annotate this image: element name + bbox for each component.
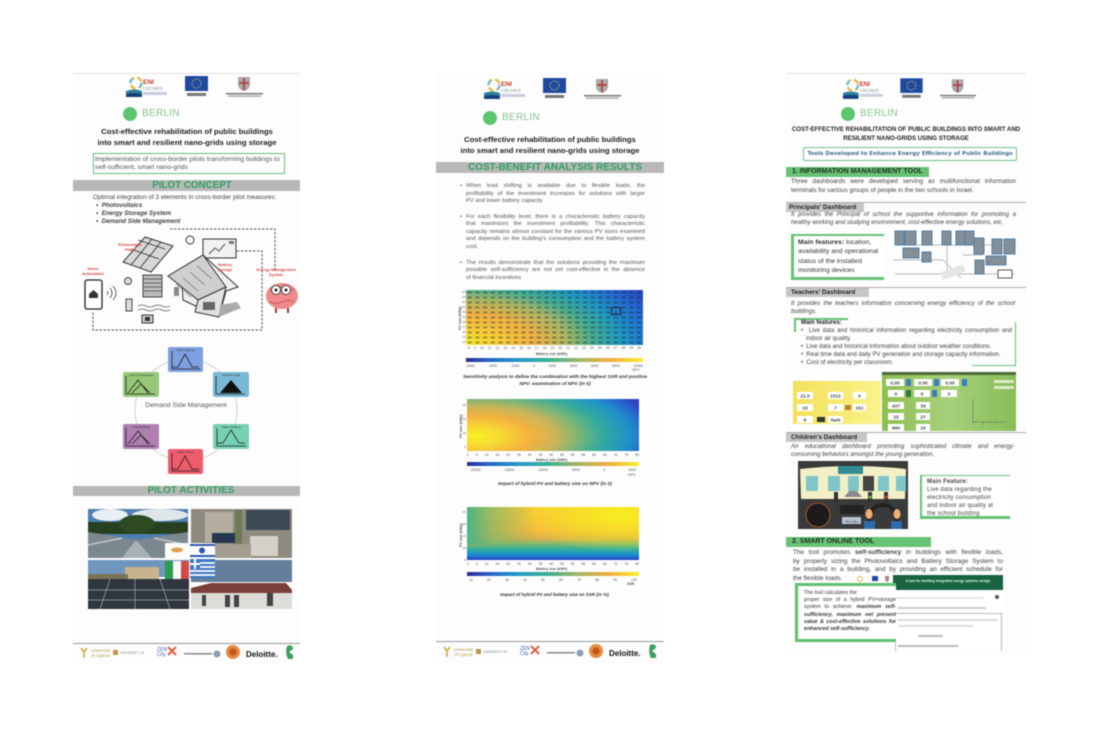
text block: principals — [790, 210, 1016, 226]
logos: programme and funders: ENI — [143, 79, 154, 86]
labels: diagram: Energy Management — [256, 267, 296, 272]
image: car dashboard game: Next Day — [845, 520, 858, 524]
logos: partners footer: UNIVERSITY OF — [483, 650, 507, 654]
callout: teachers main features: • Live data and historical information about outdoor weather conditions. — [801, 344, 991, 350]
callout: tools developed: Tools Developed to Enhance Energy Efficiency of Public Buildings — [807, 151, 1013, 157]
image: green dashboard — [881, 371, 1017, 432]
flag: Israel — [190, 543, 215, 558]
heading: childrens dashboard: Children's Dashboard — [791, 434, 857, 441]
text block: principals: healthy working and studying environment, cost-effective energy solutions, etc. — [791, 219, 1003, 226]
image: green dashboard: 0.00 — [918, 380, 928, 386]
logos: programme and funders — [125, 75, 264, 98]
logos: programme and funders — [483, 77, 622, 100]
heading: information management tool — [786, 167, 929, 177]
logo: BERLIN: BERLIN — [502, 112, 540, 123]
callout: tool calculation: system to achieve: maximum self- — [804, 604, 896, 610]
logos: partners footer: ZEN — [520, 646, 530, 652]
text block: children: An educational dashboard promoting sophisticated climate and energy- — [791, 443, 1015, 450]
image: yellow dashboard: 1012 — [830, 394, 841, 400]
icon: house — [168, 255, 241, 317]
text block: three dashboards: terminals for various groups of people in the two schools in Israel. — [791, 187, 974, 194]
panel: tools poster — [786, 72, 1026, 654]
box: valley filling: Valley Filling — [177, 450, 194, 454]
heading: childrens dashboard — [786, 433, 867, 442]
labels: diagram: Battery — [218, 262, 233, 267]
text block: findings: of financial incentives — [466, 275, 521, 281]
logo: BERLIN — [122, 106, 180, 122]
text block: findings: PV and lower battery capacity — [466, 198, 543, 204]
image: green dashboard: 0.00 — [945, 380, 955, 386]
heading: cost-benefit analysis results: COST-BENEFIT ANALYSIS RESULTS — [468, 162, 642, 173]
chart: sensitivity heatmap NPV: -6000 -4000 -2000 0 2000 4000 6000 8000 10000 — [466, 364, 643, 368]
labels: diagram: Home — [87, 266, 99, 271]
text block: findings: The results demonstrate that the solutions providing the maximum — [466, 260, 645, 266]
text block: findings: and depends on the building's consumption and the battery system — [466, 236, 645, 242]
text block: smart tool: The tool promotes self-sufficiency in buildings with flexible loads, — [793, 549, 1003, 556]
flag: Italy — [165, 561, 189, 579]
logos: programme and funders — [842, 78, 977, 100]
logos: programme and funders: CBCMED — [143, 86, 164, 91]
chart: SSR surface: Battery size (kWh) — [536, 567, 567, 571]
chart: SSR surface: PV size (kWp) — [459, 523, 463, 547]
callout: principals main features: monitoring devices — [798, 267, 855, 274]
chart: sensitivity heatmap NPV: 20 — [462, 310, 466, 314]
logos: partners footer: ZEN — [157, 647, 167, 653]
logo: BERLIN: BERLIN — [860, 108, 898, 119]
title: COST-EFFECTIVE REHABILITATION OF PUBLIC BUILDINGS INTO SMART AND — [792, 126, 1020, 133]
chart: sensitivity heatmap NPV: Battery size (kWh) — [536, 352, 567, 356]
text block: three elements: • Photovoltaics — [96, 202, 142, 209]
box: flexible load: Flexible Load — [222, 373, 240, 377]
text block: findings — [460, 182, 646, 281]
chart: sensitivity heatmap NPV: 18 — [462, 320, 466, 324]
title — [97, 127, 277, 148]
chart: sensitivity heatmap NPV: 8 9 10 11 12 13 14 15 16 17 18 19 20 21 22 23 24 25 26 27 28 29 30 — [468, 346, 641, 350]
labels: diagram: System — [269, 272, 284, 277]
text block: smart tool: the flexible loads. — [793, 574, 842, 582]
chart: SSR surface — [458, 506, 640, 586]
box: load building: Load Building — [132, 425, 150, 429]
callout: teachers main features: indoor air quality. — [806, 336, 851, 342]
labels: diagram: Automation — [82, 271, 105, 276]
logos: programme and funders: ENI — [501, 81, 512, 88]
chart: NPV surface: 10 — [463, 431, 466, 435]
logos: partners footer — [443, 643, 657, 659]
text block: teachers — [790, 300, 1016, 316]
callout: implementation: self-sufficient, smart nano-grids — [95, 164, 188, 171]
text block: findings: capacity remains almost constant for the various PV sizes examined — [466, 229, 645, 235]
chart: NPV surface: Battery size (kWh) — [536, 458, 567, 462]
panel: cost-benefit analysis poster — [436, 72, 664, 664]
chart: sensitivity heatmap NPV: PV size (kWp) — [458, 306, 462, 330]
heading: pilot activities: PILOT ACTIVITIES — [148, 485, 234, 496]
photo: red-roof building — [191, 560, 292, 609]
image: green dashboard: 0 — [948, 392, 951, 398]
chart: sensitivity heatmap NPV: 14 — [462, 340, 466, 344]
logos: programme and funders: CBCMED — [859, 88, 879, 93]
title: RESILIENT NANO-GRIDS USING STORAGE — [843, 135, 969, 142]
text block: three elements: • Energy Storage System — [96, 210, 171, 217]
heading: teachers dashboard — [786, 288, 869, 297]
chart: NPV surface: 20 — [463, 417, 466, 421]
callout: implementation — [93, 153, 285, 174]
title — [460, 135, 640, 156]
text block: findings: profitability of the investment increases for solutions with larger — [466, 191, 645, 197]
callout: tool calculation — [795, 583, 896, 642]
image: car dashboard game — [797, 460, 909, 530]
heading: pilot concept: PILOT CONCEPT — [152, 180, 232, 191]
callout: children main feature: the school building — [927, 511, 980, 517]
logos: partners footer: Deloitte. — [246, 650, 278, 659]
text block: three elements: Optimal integration of 3 elements in cross-border pilot measures: — [93, 194, 276, 201]
image: yellow dashboard: 0 — [858, 394, 861, 400]
callout: children main feature: Live data regarding the — [927, 487, 992, 493]
icon: phone home automation — [85, 280, 116, 309]
heading: smart online tool: 2. SMART ONLINE TOOL — [792, 538, 874, 545]
callout: principals main features: availability and operational — [798, 248, 878, 255]
chart: SSR surface: 40 — [463, 510, 466, 514]
photos and flags — [87, 508, 293, 610]
heading: pilot concept — [73, 180, 300, 191]
text block: children — [790, 443, 1016, 458]
text block: teachers: buildings. — [791, 308, 817, 315]
logos: programme and funders: ENI — [859, 81, 870, 88]
text block: findings: For each flexibility level, there is a characteristic battery capacity — [466, 214, 645, 220]
text block: findings: possible self-sufficiency are not yet cost-effective in the absence — [466, 267, 645, 273]
icon: battery storage — [203, 239, 236, 258]
image: green dashboard: 33 — [920, 404, 926, 410]
chart: SSR surface: 20 — [463, 534, 466, 538]
chart: NPV surface: -20000 -15000 -10000 -5000 0 5000 — [470, 468, 636, 472]
chart: sensitivity heatmap NPV — [458, 289, 644, 372]
caption: sensitivity analysis — [462, 374, 648, 387]
labels: diagram: Plant — [125, 247, 136, 252]
heading: teachers dashboard: Teachers' Dashboard — [791, 289, 855, 296]
image: yellow dashboard: 23 — [802, 406, 808, 412]
logos: partners footer: City — [520, 651, 529, 657]
caption: sensitivity analysis: NPV: examination of NPV (in €) — [519, 382, 591, 387]
chart: NPV surface: 30 — [463, 403, 466, 407]
callout: principals main features: status of the installed — [798, 258, 862, 265]
callout: tool calculation: The tool calculates the — [804, 590, 857, 596]
logos: partners footer: of Cyprus — [454, 652, 474, 657]
logos: partners footer: University — [454, 647, 474, 652]
logos: partners footer — [80, 644, 294, 660]
text block: three dashboards — [790, 178, 1016, 194]
heading: principals dashboard: Principals' Dashboard — [789, 204, 856, 211]
callout: tool calculation: proper size of a hybrid PV+storage — [804, 597, 896, 603]
photo: solar field — [88, 560, 189, 609]
chart: SSR surface: SSR — [627, 582, 634, 586]
callout: children main feature: electricity consumption — [927, 495, 991, 501]
image: yellow dashboard: 7 — [834, 406, 837, 412]
callout: implementation: Implementation of cross-border pilots transforming buildings to — [95, 156, 280, 162]
image: floor plan — [892, 230, 1016, 280]
callout: tool calculation: value & cost-effective solutions for — [804, 619, 896, 625]
image: green dashboard: 15 — [893, 414, 899, 420]
image: green dashboard: 0 — [921, 392, 924, 398]
callout: tool calculation: sufficiency, maximum net present — [804, 612, 896, 618]
text block: smart tool — [792, 548, 1004, 582]
callout: teachers main features: • Cost of electricity per classroom. — [801, 360, 893, 366]
callout: teachers main features: • Live data and historical information regarding electricity consumption and — [801, 328, 1012, 334]
icon: brain energy management system — [266, 283, 298, 313]
box: peak clipping: Peak Clipping — [176, 348, 195, 352]
image: green dashboard: 437 — [892, 404, 900, 410]
callout: teachers main features — [793, 317, 1017, 367]
logos: programme and funders: CBCMED — [501, 88, 522, 93]
caption: SSR impact: Impact of hybrid PV and battery size on SSR (in %). — [500, 592, 610, 597]
icon: PV panel — [123, 236, 194, 272]
chart: NPV surface: 0 — [464, 445, 466, 449]
box: load conservation: Load Conservation — [128, 373, 154, 377]
callout: principals main features: Main features: location, — [798, 239, 871, 246]
chart: sensitivity heatmap NPV: NPV — [632, 368, 639, 372]
image: online tool screenshot — [893, 575, 1003, 650]
image: yellow dashboard — [792, 380, 882, 425]
text block: children: consuming behaviors amongst the young generation. — [791, 451, 934, 458]
logos: partners footer: of Cyprus — [91, 653, 111, 658]
text block: three elements — [92, 194, 276, 226]
text block: three elements: • Demand Side Management — [96, 218, 180, 225]
text block: findings: • — [460, 214, 462, 220]
image: yellow dashboard: NaN — [831, 418, 841, 424]
chart: NPV surface — [458, 398, 640, 477]
chart: NPV surface: PV size (kWp) — [459, 414, 463, 438]
chart: NPV surface: 0 5 10 15 20 25 30 35 40 45 50 55 60 65 70 75 80 — [467, 453, 639, 457]
diagram: nano-grid house — [82, 228, 299, 332]
chart: sensitivity heatmap NPV: 23 — [462, 295, 466, 299]
logo: BERLIN — [840, 106, 898, 122]
chart: sensitivity heatmap NPV: 22 — [462, 300, 466, 304]
image: green dashboard: 27 — [920, 414, 926, 420]
logo: BERLIN: BERLIN — [142, 108, 180, 119]
chart: NPV surface: NPV — [628, 473, 635, 477]
chart: SSR surface: 30 — [463, 522, 466, 526]
title: Cost-effective rehabilitation of public buildings — [464, 135, 636, 144]
callout: children main feature: Main Feature: — [927, 479, 968, 485]
chart: sensitivity heatmap NPV: 16 — [462, 330, 466, 334]
chart: SSR surface: 5 — [464, 558, 466, 562]
chart: SSR surface: 10 — [463, 546, 466, 550]
callout: children main feature — [920, 475, 1010, 519]
callout: tool calculation: enhanced self-sufficiency. — [804, 626, 870, 632]
text block: findings: • — [460, 260, 462, 266]
flag: Greece — [190, 559, 215, 578]
diagram: demand side management — [122, 346, 250, 475]
image: online tool screenshot: A tool for building integrated energy systems design — [906, 579, 990, 583]
photo: rooftop and trees — [88, 509, 188, 558]
text block: smart tool: by properly sizing the Photovoltaics and Battery Storage System to — [793, 558, 1003, 564]
title: into smart and resilient nano-grids using storage — [98, 138, 276, 147]
logos: partners footer: Deloitte. — [609, 649, 641, 658]
chart: sensitivity heatmap NPV: 19 — [462, 315, 466, 319]
heading: information management tool: 1. INFORMATION MANAGEMENT TOOL — [792, 168, 923, 175]
callout: children main feature: and indoor air quality at — [927, 503, 993, 509]
chart: SSR surface: 10 20 30 40 50 60 70 80 90 100 — [469, 578, 637, 582]
text block: smart tool: be installed in a building, and by providing an efficient schedule for — [793, 566, 1003, 573]
text block: findings: cost. — [466, 244, 478, 250]
title — [791, 126, 1021, 142]
logos: screenshot header — [856, 575, 890, 583]
text block: findings: When load shifting is available due to flexible loads, the — [466, 183, 645, 189]
logo: BERLIN — [482, 110, 540, 126]
text block: principals: It provides the Principal of school the supportive information for promoting a — [791, 211, 1016, 218]
text block: three dashboards: Three dashboards were developed serving as multifunctional information — [791, 178, 1016, 185]
panel: pilot concept poster — [73, 72, 300, 664]
logos: partners footer: City — [157, 652, 166, 658]
photo: aerial roof — [191, 509, 292, 558]
chart: sensitivity heatmap NPV: 15 — [462, 335, 466, 339]
labels: diagram: Storage — [218, 267, 233, 272]
box: valley shifting: Valley Shifting — [222, 425, 241, 429]
image: green dashboard: 0 — [895, 392, 898, 398]
text block: teachers: It provides the teachers information concerning energy efficiency of the school — [791, 300, 1015, 307]
title: into smart and resilient nano-grids using storage — [460, 146, 639, 155]
image: yellow dashboard: 6 — [804, 418, 807, 424]
text block: findings: that maximizes the investment profitability. This characteristic — [466, 221, 645, 227]
chart: sensitivity heatmap NPV: 24 — [462, 290, 466, 294]
labels: diagram — [82, 242, 296, 277]
heading: principals dashboard — [786, 203, 864, 212]
logos: partners footer: University — [91, 648, 111, 653]
chart: SSR surface: 0 5 10 15 20 25 30 35 40 45 50 55 60 65 70 75 80 — [467, 562, 639, 566]
image: yellow dashboard: 151 — [855, 406, 864, 412]
heading: smart online tool — [786, 537, 931, 547]
chart: sensitivity heatmap NPV: 21 — [462, 305, 466, 309]
caption: sensitivity analysis: Sensitivity analysis to define the combination with the highest SSR and positive — [463, 375, 647, 380]
text block: findings: • — [460, 183, 462, 189]
title: Cost-effective rehabilitation of public buildings — [101, 127, 273, 136]
logos: partners footer: UNIVERSITY OF — [120, 651, 144, 655]
heading: pilot activities — [73, 486, 300, 496]
callout: tools developed — [803, 147, 1017, 161]
image: green dashboard: 0.00 — [890, 380, 900, 386]
callout: teachers main features: • Real time data and daily PV generation and storage capacity information. — [801, 352, 1001, 358]
callout: teachers main features: Main features: — [801, 320, 842, 326]
caption: NPV impact: Impact of hybrid PV and battery size on NPV (in €) — [498, 482, 612, 487]
labels: diagram: Photovoltaic — [118, 242, 143, 247]
flag: Cyprus — [165, 543, 189, 560]
callout: principals main features — [791, 234, 884, 280]
icon: smart devices — [124, 275, 170, 323]
diagram: demand side management: Demand Side Management — [145, 402, 227, 409]
chart: sensitivity heatmap NPV: 17 — [462, 325, 466, 329]
image: yellow dashboard: 21.0 — [800, 394, 810, 400]
